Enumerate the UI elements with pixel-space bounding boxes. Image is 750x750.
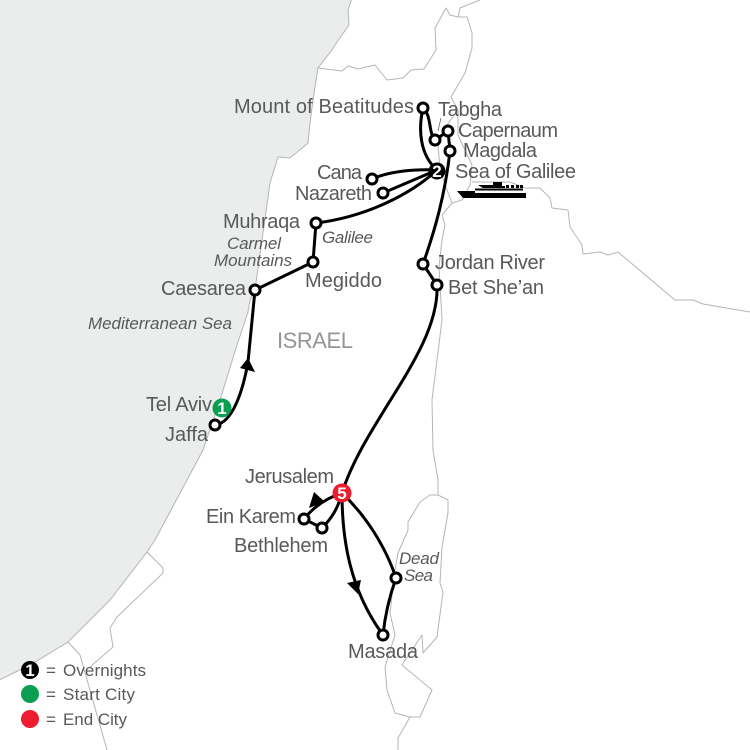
marker: Tel Aviv start city: 1 bbox=[217, 399, 227, 418]
labels: geographic features bbox=[88, 228, 440, 585]
route: Galilee loops bbox=[342, 108, 450, 493]
legend: start city: = bbox=[46, 685, 56, 704]
labels: place names: Jerusalem bbox=[245, 466, 334, 488]
labels: place names: Mount of Beatitudes bbox=[234, 96, 414, 118]
legend: end city bbox=[21, 710, 128, 729]
legend: overnights: = bbox=[46, 661, 56, 680]
labels: place names: Bet She’an bbox=[448, 277, 544, 299]
legend: end city: End City bbox=[63, 710, 128, 729]
legend: overnights: 1 bbox=[25, 661, 35, 680]
labels: place names: Caesarea bbox=[161, 278, 247, 300]
arrow: northbound bbox=[240, 358, 255, 372]
icon: ship bbox=[457, 182, 526, 198]
labels: place names: Jordan River bbox=[435, 252, 545, 274]
label: ISRAEL: ISRAEL bbox=[277, 328, 353, 353]
legend: start city bbox=[21, 685, 136, 704]
marker: 2 overnights Sea of Galilee: 2 bbox=[432, 162, 442, 181]
panel: Mediterranean Sea bbox=[0, 0, 353, 682]
legend: end city: = bbox=[46, 710, 56, 729]
labels: place names: Jaffa bbox=[165, 424, 209, 446]
marker: Jerusalem end city bbox=[332, 484, 352, 503]
marker: 2 overnights Sea of Galilee bbox=[428, 162, 446, 181]
labels: place names: Magdala bbox=[463, 140, 538, 162]
leader line: Tabgha bbox=[438, 118, 441, 131]
stops: open circle markers bbox=[210, 103, 455, 640]
labels: place names: Tel Aviv bbox=[146, 394, 212, 416]
labels: place names: Masada bbox=[348, 641, 419, 663]
labels: geographic features: Sea bbox=[404, 566, 433, 585]
labels: place names: Capernaum bbox=[458, 120, 558, 142]
labels: place names: Megiddo bbox=[305, 270, 382, 292]
legend: start city: Start City bbox=[63, 685, 136, 704]
labels: geographic features: Mountains bbox=[214, 251, 292, 270]
arrow: towards Ein Karem bbox=[309, 492, 325, 508]
labels: place names: Bethlehem bbox=[234, 535, 328, 557]
labels: place names bbox=[146, 96, 576, 663]
labels: place names: Sea of Galilee bbox=[455, 161, 576, 183]
labels: geographic features: Galilee bbox=[322, 228, 373, 247]
route: Jerusalem day trips bbox=[304, 492, 396, 635]
labels: geographic features: Carmel bbox=[227, 234, 282, 253]
labels: place names: Muhraqa bbox=[223, 211, 301, 233]
arrow: towards Masada bbox=[347, 580, 361, 594]
labels: place names: Nazareth bbox=[295, 183, 372, 205]
route: Jaffa to Sea of Galilee bbox=[219, 170, 437, 424]
marker: Jerusalem end city: 5 bbox=[337, 484, 347, 503]
labels: place names: Cana bbox=[317, 162, 363, 184]
labels: geographic features: Dead bbox=[399, 549, 440, 568]
labels: geographic features: Mediterranean Sea bbox=[88, 314, 232, 333]
legend bbox=[21, 661, 146, 729]
legend: overnights: Overnights bbox=[63, 661, 146, 680]
marker: Tel Aviv start city bbox=[212, 398, 232, 418]
labels: place names: Ein Karem bbox=[206, 506, 296, 528]
labels: place names: Tabgha bbox=[438, 99, 503, 121]
legend: overnights bbox=[21, 661, 146, 680]
